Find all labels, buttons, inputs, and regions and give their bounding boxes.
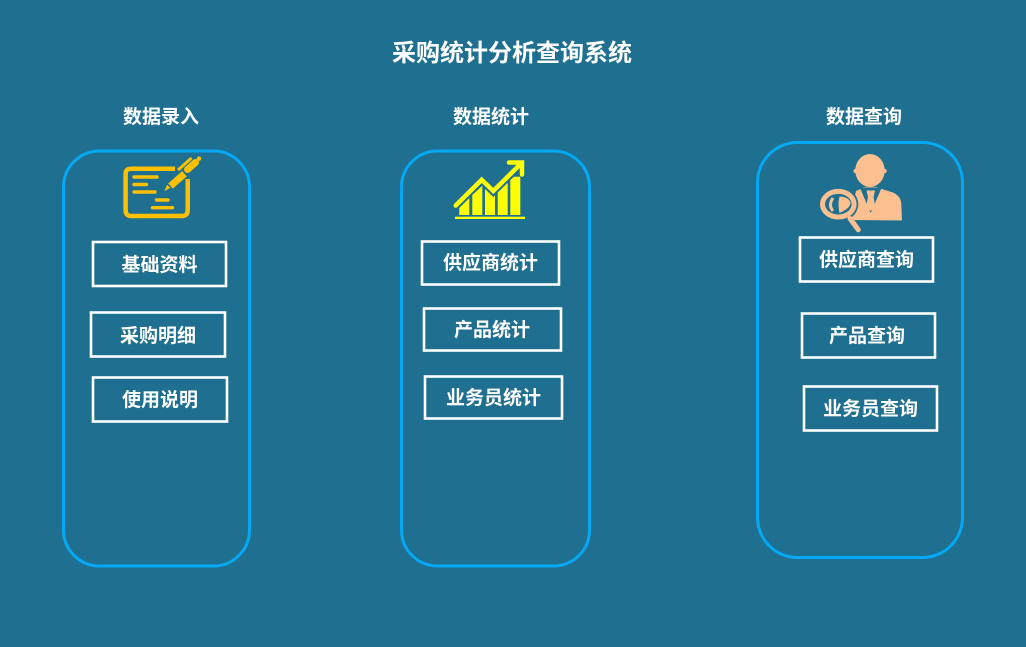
panel: data statistics [402,151,590,566]
button: product query [802,314,935,358]
button: product statistics [424,308,561,350]
button: instructions: 使用说明 [122,389,198,411]
button: product query: 产品查询 [829,325,905,347]
button: product statistics: 产品统计 [454,318,530,341]
button: basic data [93,242,226,286]
button: salesperson query: 业务员查询 [823,398,918,420]
icon: person with magnifier [818,154,902,230]
title: 采购统计分析查询系统 [392,40,632,67]
button: salesperson query [804,386,937,430]
button: salesperson statistics: 业务员统计 [446,386,541,409]
heading: data statistics: 数据统计 [453,105,529,128]
panel: data query [758,142,962,558]
button: supplier query [800,238,933,282]
button: basic data: 基础资料 [121,254,198,276]
button: instructions [93,378,227,422]
button: supplier statistics [422,242,559,284]
button: salesperson statistics [425,376,562,418]
icon: form and pen [126,156,201,216]
heading: data entry: 数据录入 [123,106,199,128]
icon: rising bar chart [455,162,525,219]
button: purchase details [91,312,225,356]
button: supplier statistics: 供应商统计 [443,251,538,274]
heading: data query: 数据查询 [826,106,902,128]
button: purchase details: 采购明细 [120,325,196,347]
panel: data entry [64,151,250,566]
button: supplier query: 供应商查询 [819,248,914,271]
